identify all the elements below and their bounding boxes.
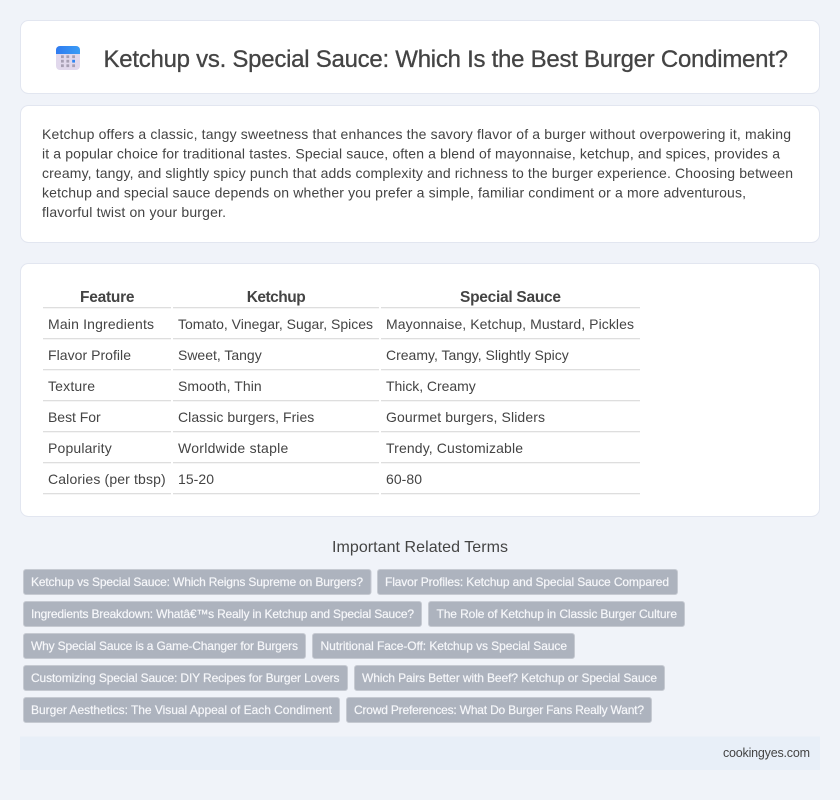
tag: Customizing Special Sauce: DIY Recipes for Burger Lovers	[31, 671, 340, 685]
tag: The Role of Ketchup in Classic Burger Culture	[436, 607, 677, 621]
table row: main ingredients: Main Ingredients	[48, 316, 154, 332]
table row: best for: Gourmet burgers, Sliders	[386, 409, 545, 425]
footer site name: cookingyes.com	[723, 746, 810, 760]
text block: introduction paragraph: ketchup and special sauce depends on whether you prefer a simple, familiar condiment or a more adventurous,	[42, 184, 746, 200]
table row: main ingredients	[48, 316, 634, 332]
tag	[24, 634, 306, 658]
text block: introduction paragraph: Ketchup offers a classic, tangy sweetness that enhances the savory flavor of a burger without overpowering it, making	[42, 126, 791, 142]
text block: introduction paragraph: creamy, tangy, and slightly spicy punch that adds complexity and richness to the burger experience. Choosing between	[42, 165, 793, 181]
table header	[80, 289, 561, 306]
table row: popularity	[48, 440, 523, 456]
table row: main ingredients: Mayonnaise, Ketchup, Mustard, Pickles	[386, 316, 634, 332]
table row: texture: Smooth, Thin	[178, 378, 262, 394]
tag: Nutritional Face-Off: Ketchup vs Special Sauce	[320, 639, 567, 653]
tag	[354, 666, 664, 690]
tag	[428, 602, 684, 626]
table row: texture: Texture	[48, 378, 95, 394]
table row: best for: Best For	[48, 409, 101, 425]
text block: introduction paragraph: it a popular choice for traditional tastes. Special sauce, often a blend of mayonnaise, ketchup, and spices, provides a	[42, 146, 780, 162]
table row: calories	[48, 471, 422, 487]
table header: Special Sauce	[460, 289, 561, 306]
table row: popularity: Worldwide staple	[178, 440, 289, 456]
tag: Flavor Profiles: Ketchup and Special Sauce Compared	[385, 575, 669, 589]
title: Ketchup vs. Special Sauce: Which Is the Best Burger Condiment?	[104, 46, 788, 73]
tag: Crowd Preferences: What Do Burger Fans Really Want?	[354, 703, 644, 717]
tag: Burger Aesthetics: The Visual Appeal of Each Condiment	[31, 703, 333, 717]
panel: comparison table	[20, 264, 820, 516]
table row: best for	[48, 409, 545, 425]
tag	[24, 698, 340, 722]
tag: Ingredients Breakdown: Whatâ€™s Really in Ketchup and Special Sauce?	[31, 607, 414, 621]
table row: flavor profile: Creamy, Tangy, Slightly Spicy	[386, 347, 569, 363]
table row: texture: Thick, Creamy	[386, 378, 476, 394]
table row: calories: Calories (per tbsp)	[48, 471, 166, 487]
table row: popularity: Popularity	[48, 440, 112, 456]
table row: texture	[48, 378, 476, 394]
table row: flavor profile: Sweet, Tangy	[178, 347, 262, 363]
heading: important related terms: Important Related Terms	[332, 539, 508, 556]
table row: main ingredients: Tomato, Vinegar, Sugar, Spices	[178, 316, 373, 332]
tag: Which Pairs Better with Beef? Ketchup or Special Sauce	[362, 671, 657, 685]
tag: Why Special Sauce is a Game-Changer for Burgers	[31, 639, 298, 653]
tag	[312, 634, 574, 658]
tag	[24, 666, 348, 690]
table row: best for: Classic burgers, Fries	[178, 409, 314, 425]
panel: title card	[20, 20, 820, 94]
table header: Feature	[80, 289, 135, 306]
tag	[346, 698, 652, 722]
footer	[20, 736, 820, 770]
table row: calories: 15-20	[178, 471, 214, 487]
text block: introduction paragraph: flavorful twist on your burger.	[42, 204, 226, 220]
tag	[24, 602, 422, 626]
icon: calendar grid	[56, 46, 80, 70]
panel: introduction	[20, 106, 820, 242]
table row: flavor profile	[48, 347, 569, 363]
panel: related term tags	[24, 570, 684, 722]
tag	[378, 570, 678, 594]
table row: calories: 60-80	[386, 471, 422, 487]
table row: popularity: Trendy, Customizable	[386, 440, 523, 456]
text block: introduction paragraph	[42, 126, 793, 220]
tag	[24, 570, 371, 594]
table row: flavor profile: Flavor Profile	[48, 347, 131, 363]
table header: Ketchup	[247, 289, 306, 306]
tag: Ketchup vs Special Sauce: Which Reigns Supreme on Burgers?	[31, 575, 363, 589]
